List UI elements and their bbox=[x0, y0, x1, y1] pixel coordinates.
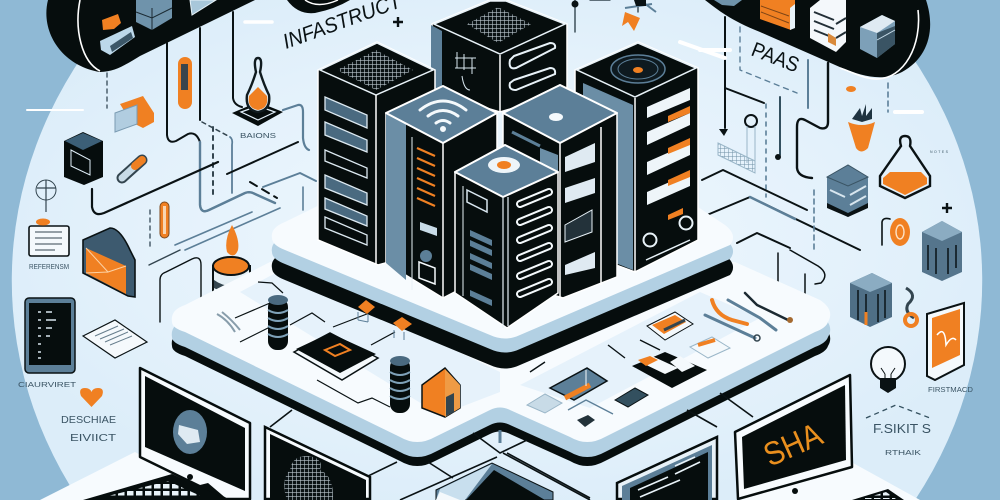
monitor: code bbox=[617, 437, 717, 500]
icon: orange signal top bbox=[622, 0, 656, 31]
keyboard: left bbox=[83, 474, 228, 500]
slots: right rack bbox=[647, 88, 690, 205]
icon: database cylinder orange bbox=[213, 257, 250, 301]
base: right desk bbox=[740, 463, 920, 500]
label: RTHAIK: RTHAIK bbox=[885, 448, 921, 457]
icon: database stack one bbox=[268, 295, 288, 350]
label: FIRSTMACD: FIRSTMACD bbox=[928, 385, 974, 394]
icon: light bulb bbox=[871, 347, 905, 393]
cloud: top left bbox=[46, 0, 255, 72]
server: front rack bbox=[455, 145, 558, 328]
icon: globe bbox=[36, 180, 56, 212]
cloud: top center bbox=[287, 0, 350, 13]
slots: back box bbox=[510, 43, 555, 90]
slots: left rack bbox=[325, 97, 367, 245]
icon: arrow tip bbox=[719, 129, 728, 136]
icon: dot end bbox=[775, 154, 781, 160]
keyboard: right bbox=[852, 489, 904, 500]
label: REFERENSM: REFERENSM bbox=[29, 262, 69, 271]
icon: faint grid bbox=[718, 115, 757, 173]
platform shading right bbox=[520, 292, 760, 408]
server: wifi rack bbox=[386, 86, 497, 298]
icon: orange lozenge bbox=[160, 202, 169, 238]
icon: grey server bbox=[136, 0, 172, 30]
icon: orange node one bbox=[358, 300, 375, 322]
icon: twist bbox=[905, 288, 917, 326]
icon: white server bbox=[810, 0, 846, 52]
label: BAIONS: BAIONS bbox=[240, 131, 276, 140]
monitor: cloud bbox=[265, 427, 370, 500]
base: left desk bbox=[40, 452, 222, 500]
icon: chain links bbox=[217, 312, 240, 332]
label: FSIKIT S: F.SIKIT S bbox=[873, 421, 931, 436]
heading: PAAS: PAAS bbox=[748, 38, 802, 77]
icon: orange house bbox=[422, 368, 460, 417]
connector lines right bbox=[575, 0, 922, 302]
icon: blue server bbox=[860, 15, 895, 58]
circuit symbol bbox=[455, 52, 476, 90]
label: DESCHIAE: DESCHIAE bbox=[61, 415, 116, 426]
icon: pill bbox=[122, 160, 142, 178]
icon: paper sheet bbox=[83, 320, 147, 358]
icon: envelope bbox=[83, 228, 135, 297]
icon: document bbox=[29, 218, 69, 256]
icon: heart bbox=[80, 388, 103, 407]
platform: upper tier bbox=[272, 195, 733, 368]
prism bbox=[550, 368, 607, 400]
platform wires bbox=[235, 282, 660, 407]
connector lines between tiers bbox=[270, 393, 753, 500]
orange lights: right rack bbox=[668, 106, 690, 220]
icon: orange dot bbox=[846, 86, 856, 92]
icon: plant pot bbox=[848, 104, 875, 152]
pale card bbox=[527, 394, 562, 413]
icon: orange server bbox=[760, 0, 795, 30]
icon: cards on right platform bbox=[527, 312, 730, 427]
monitor: left bbox=[140, 368, 250, 500]
icon: orange capsule bbox=[178, 57, 192, 109]
dark chip bbox=[615, 388, 648, 407]
pills: front rack bbox=[520, 192, 549, 294]
connector lines left bbox=[27, 12, 316, 322]
icon: framed server bbox=[190, 0, 216, 15]
icon: orange tablet bbox=[927, 303, 964, 380]
device: center prism bbox=[436, 463, 553, 500]
icon: rack cube bbox=[850, 273, 892, 327]
cloud: top right bbox=[705, 0, 930, 79]
card two bbox=[690, 337, 730, 358]
icon: flame bbox=[226, 225, 238, 256]
icon: database stack two bbox=[390, 356, 410, 413]
icon: small blue server bbox=[714, 0, 742, 6]
icon: stand with dot bbox=[572, 0, 578, 8]
label: tiny note: NOTES bbox=[930, 150, 949, 154]
platform: lower tier bbox=[172, 262, 830, 466]
icon: flask on base bbox=[232, 58, 283, 126]
screen text: SHA: SHA bbox=[758, 415, 828, 473]
icon: folder card bbox=[115, 96, 154, 132]
card one bbox=[647, 312, 693, 340]
server: left rack bbox=[318, 42, 435, 265]
panels: middle right rack bbox=[565, 143, 595, 275]
black tablet bbox=[632, 352, 707, 388]
label: CIAURVIRET: CIAURVIRET bbox=[18, 380, 77, 389]
icon: plus marker top bbox=[393, 17, 403, 27]
orange bars bbox=[417, 148, 435, 206]
icon: light block bbox=[100, 26, 135, 55]
icon: black cube bbox=[64, 132, 103, 185]
platform shading left bbox=[240, 268, 500, 415]
server: right rack bbox=[575, 42, 698, 272]
icon: conical flask bbox=[880, 136, 930, 198]
icon: plus marker bbox=[942, 203, 952, 213]
bars: front rack bbox=[470, 230, 492, 306]
icon: blue server box bbox=[827, 165, 868, 217]
label: EIVIICT: EIVIICT bbox=[70, 433, 116, 444]
icon: tablet bbox=[25, 298, 75, 373]
icon: orange block bbox=[102, 14, 121, 30]
roof dashes bbox=[866, 405, 930, 418]
icon: dark server right bbox=[922, 221, 962, 281]
icon: wrenches bbox=[705, 293, 793, 341]
server: middle right rack bbox=[503, 85, 617, 298]
icon: orange node two bbox=[393, 317, 412, 340]
small chip bbox=[577, 415, 595, 427]
monitor: SHA bbox=[735, 375, 852, 499]
icon: black tablet with orange mark bbox=[294, 333, 378, 380]
icon: orange spiral bbox=[890, 218, 910, 246]
server: back box bbox=[431, 0, 567, 112]
icon: wifi bbox=[420, 101, 466, 130]
